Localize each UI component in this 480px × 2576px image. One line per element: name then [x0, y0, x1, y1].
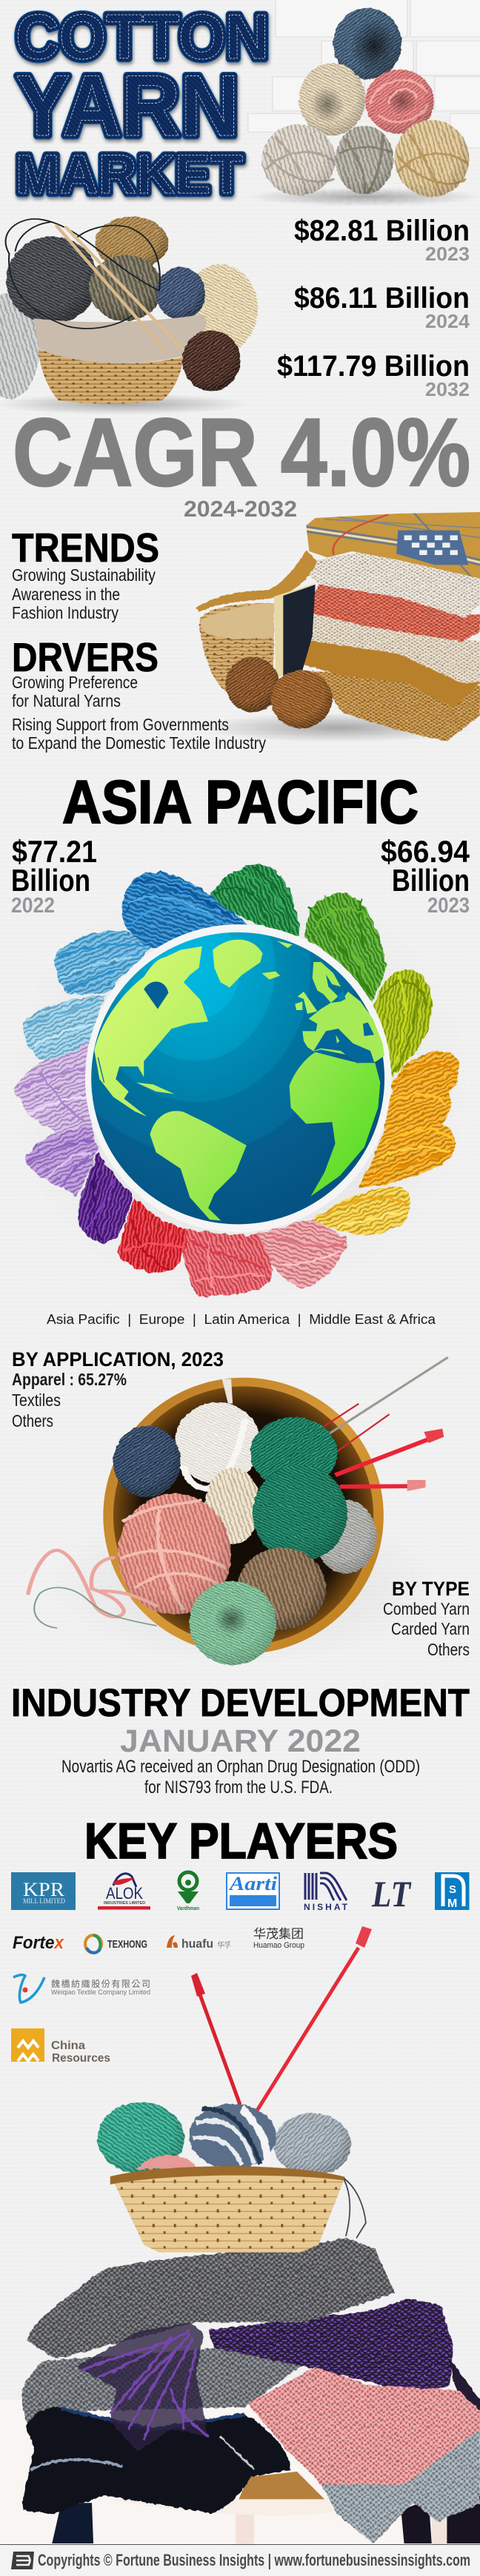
logo: China Resources — [11, 2028, 110, 2065]
title: Cotton Yarn Market: MARKET — [16, 144, 243, 205]
logo: SM mark: S — [449, 1883, 456, 1896]
logo: Huafu: 华孚 — [217, 1939, 231, 1950]
application list: Apparel : 65.27% — [12, 1370, 127, 1389]
heading: By Type: BY TYPE — [392, 1578, 470, 1600]
logo: Huamao Group — [253, 1927, 304, 1950]
development description: for NIS793 from the U.S. FDA. — [144, 1778, 333, 1798]
title: Cotton Yarn Market: YARN — [16, 57, 239, 154]
drivers list: to Expand the Domestic Textile Industry — [12, 733, 266, 753]
stat: 2024 market size — [294, 282, 470, 332]
stat: Asia Pacific 2022: 2022 — [11, 894, 55, 918]
stat: Asia Pacific 2022: $77.21 — [12, 834, 97, 869]
application list — [12, 1370, 127, 1430]
drivers list: Rising Support from Governments — [12, 715, 229, 734]
heading: Key Players: KEY PLAYERS — [84, 1813, 398, 1869]
logo: Nishat — [304, 1873, 348, 1912]
title: Cotton Yarn Market: MARKET — [16, 144, 243, 205]
title: Cotton Yarn Market — [16, 2, 269, 205]
illustration: wicker basket with yarn balls — [97, 2102, 366, 2253]
illustration: wooden bowl of yarn balls with needles — [28, 1358, 447, 1665]
logo: Huamao Group: 华茂集团 — [253, 1927, 304, 1941]
logo: Huamao Group: Huamao Group — [253, 1941, 304, 1950]
illustration: red knitting needles — [191, 1926, 372, 2111]
title: Cotton Yarn Market: YARN — [16, 57, 239, 154]
stat: Asia Pacific 2023 — [381, 834, 470, 918]
logo: China Resources: China — [51, 2039, 85, 2052]
stat: 2032 market size — [277, 350, 470, 400]
type list — [383, 1599, 470, 1659]
logo: Texhong — [85, 1935, 147, 1953]
title: Cotton Yarn Market: MARKET — [16, 144, 243, 205]
illustration: globe — [85, 924, 391, 1232]
logo: SM mark: M — [447, 1897, 457, 1910]
heading: Asia Pacific: ASIA PACIFIC — [62, 767, 419, 836]
trends list: Fashion Industry — [12, 603, 119, 622]
drivers list — [12, 673, 266, 753]
bottom scene: table top — [0, 2400, 480, 2545]
logo: China Resources: Resources — [52, 2052, 110, 2065]
region legend: Asia Pacific | Europe | Latin America | Middle East & Africa — [47, 1312, 436, 1327]
logo: Fortex: Fortex — [13, 1933, 65, 1953]
illustration: folded knitwear stack with basket — [196, 512, 480, 742]
stat: 2032 market size: $117.79 Billion — [277, 350, 470, 383]
icon: Fortune Business Insights mark — [11, 2552, 34, 2569]
logo: Nishat: NISHAT — [304, 1902, 348, 1912]
logo: Vardhman — [177, 1872, 199, 1911]
footer bar — [0, 2544, 480, 2576]
stat: Asia Pacific 2022: Billion — [11, 863, 90, 898]
drivers list: Growing Preference — [12, 673, 138, 692]
title: Cotton Yarn Market: COTTON — [16, 2, 269, 73]
illustration: basket with yarn and knitting needles — [0, 217, 258, 414]
trends list — [12, 565, 156, 622]
logo: Huafu: huafu — [181, 1937, 213, 1951]
drivers list: for Natural Yarns — [12, 691, 121, 710]
heading: Trends: TRENDS — [12, 525, 159, 571]
CAGR period: 2024-2032 — [184, 496, 297, 522]
stat: Asia Pacific 2023: 2023 — [427, 894, 470, 918]
brick wall backdrop — [248, 0, 480, 148]
trends list: Growing Sustainability — [12, 565, 156, 585]
logo: Weiqiao Textile: 魏橋紡織股份有限公司 — [51, 1978, 150, 1989]
stat: 2032 market size: 2032 — [425, 378, 470, 400]
logo: Weiqiao Textile: Weiqiao Textile Company Limited — [51, 1988, 150, 1996]
heading: By Application: BY APPLICATION, 2023 — [12, 1348, 224, 1371]
stat: 2023 market size: $82.81 Billion — [294, 215, 470, 247]
stat: 2023 market size: 2023 — [425, 243, 470, 265]
trends list: Awareness in the — [12, 585, 120, 604]
logo: Alok Industries — [98, 1874, 150, 1909]
application list: Others — [12, 1411, 53, 1430]
logo: Texhong: TEXHONG — [107, 1938, 147, 1951]
illustration: knit stack with basket on stool — [22, 2238, 480, 2546]
stat: 2024 market size: $86.11 Billion — [294, 282, 470, 315]
illustration: pyramid of yarn balls — [248, 8, 480, 206]
stat: 2023 market size — [294, 215, 470, 265]
logo: KPR Mill Limited — [11, 1872, 76, 1910]
heading: Drivers: DRVERS — [12, 634, 159, 680]
type list: Others — [427, 1640, 470, 1659]
logo: SM mark — [435, 1872, 470, 1910]
development date: JANUARY 2022 — [120, 1724, 361, 1759]
logo: Huafu — [167, 1935, 231, 1951]
stat: Asia Pacific 2023: $66.94 — [381, 834, 470, 869]
title: Cotton Yarn Market: COTTON — [16, 2, 269, 73]
logo: LT script mark: LT — [371, 1873, 412, 1914]
logo: Aarti — [227, 1873, 279, 1909]
logo: Weiqiao Textile — [13, 1975, 150, 2002]
logo: KPR Mill Limited: MILL LIMITED — [23, 1898, 65, 1906]
application list: Textiles — [12, 1390, 61, 1410]
title: Cotton Yarn Market: COTTON — [16, 2, 269, 73]
logo: Aarti: Aarti — [228, 1873, 278, 1894]
stat: Asia Pacific 2022 — [11, 834, 97, 918]
title: Cotton Yarn Market: YARN — [16, 57, 239, 154]
logo: Alok Industries: INDUSTRIES LIMITED — [104, 1901, 145, 1906]
logo: KPR Mill Limited: KPR — [23, 1879, 65, 1900]
illustration: coloured thread skeins around globe — [6, 864, 471, 1305]
development description — [61, 1757, 420, 1798]
stat: 2024 market size: 2024 — [425, 310, 470, 332]
logo: Alok Industries: ALOK — [106, 1884, 143, 1903]
logo: Vardhman: Vardhman — [177, 1905, 199, 1911]
